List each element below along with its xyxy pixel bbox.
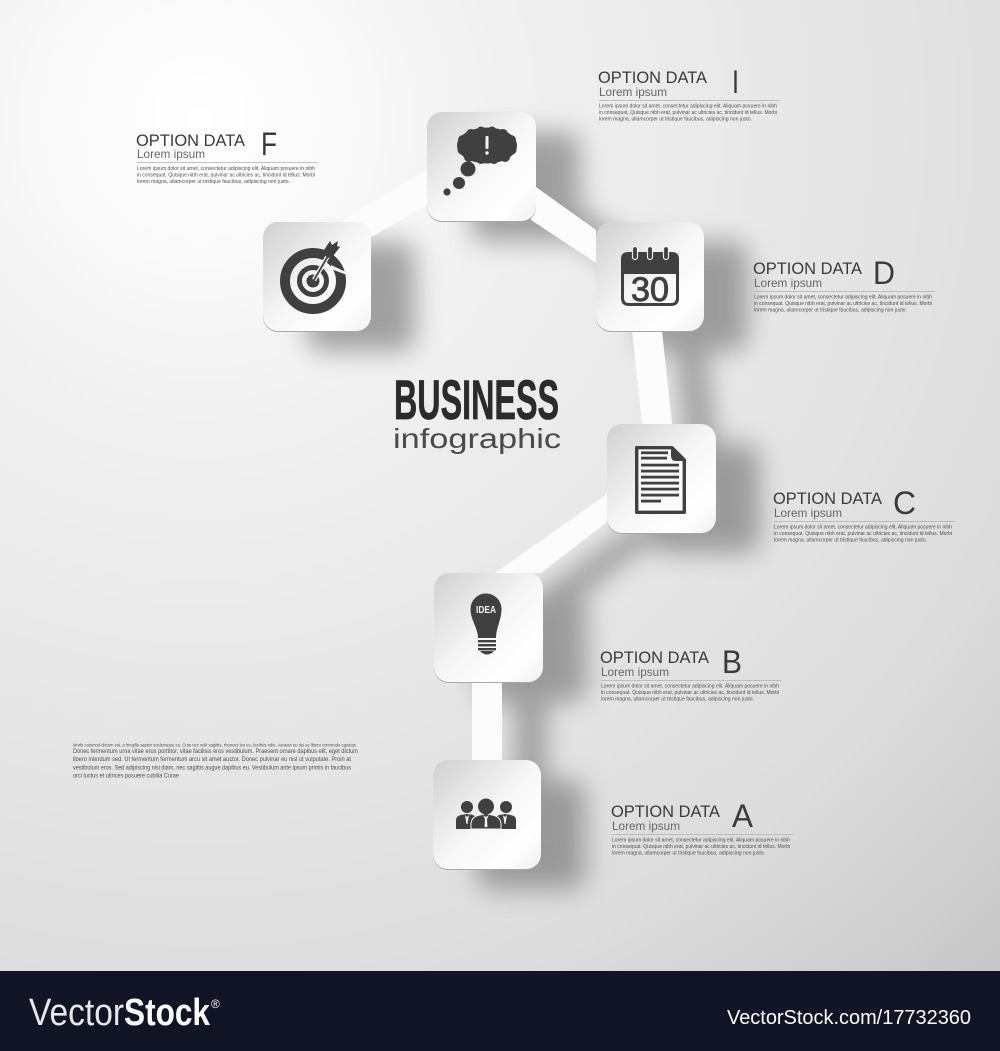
text block: option C: lorem magna, ullamcorper ut tristique faucibus, adipiscing non justo. bbox=[774, 538, 927, 544]
text block: option D: D bbox=[873, 255, 895, 291]
text block: option B: OPTION DATA bbox=[600, 648, 710, 667]
text block: option D bbox=[753, 255, 935, 314]
text block: description paragraph: Donec fermentum urna vitae eros porttitor, vitae facilisis eros vestibulum. Praesent ornare dapibus elit, eget dictum bbox=[73, 748, 358, 755]
text block: option C: Lorem ipsum dolor sit amet, consectetur adipiscing elit. Aliquam posuere in nibh bbox=[774, 524, 952, 530]
title: infographic bbox=[393, 423, 561, 454]
icon: target with arrow bbox=[285, 241, 347, 309]
card: idea bbox=[434, 573, 543, 683]
connector: idea to people bbox=[472, 682, 502, 760]
connector: calendar to document bbox=[632, 331, 672, 424]
text block: option A: in consequat. Quisque nibh erat, pulvinar ac ultricies ac, tincidunt id tellus. Morbi bbox=[612, 844, 790, 850]
footer logo: ® bbox=[211, 997, 220, 1011]
connector: document to idea bbox=[495, 494, 607, 573]
text block: option F: Lorem ipsum bbox=[137, 147, 205, 161]
text block: option C: OPTION DATA bbox=[773, 489, 883, 508]
text block: option D: in consequat. Quisque nibh erat, pulvinar ac ultricies ac, tincidunt id tellus. Morbi bbox=[754, 301, 932, 307]
text block: option I: Lorem ipsum bbox=[599, 85, 667, 99]
soft shadows of cards and connectors bbox=[307, 132, 760, 889]
text block: option I: Lorem ipsum dolor sit amet, consectetur adipiscing elit. Aliquam posuere in nibh bbox=[599, 104, 777, 110]
icon: document bbox=[637, 446, 686, 512]
text block: description paragraph: orci luctus et ultrices posuere cubilia Curae bbox=[73, 772, 179, 780]
text block: option I: in consequat. Quisque nibh erat, pulvinar ac ultricies ac, tincidunt id tellus. Morbi bbox=[599, 110, 777, 116]
text block: option F: F bbox=[261, 126, 277, 162]
text block: option F: lorem magna, ullamcorper ut tristique faucibus, adipiscing non justo. bbox=[137, 179, 290, 185]
text block: option I: OPTION DATA bbox=[598, 68, 708, 87]
text block: option D: Lorem ipsum bbox=[754, 276, 822, 290]
text block: option F: OPTION DATA bbox=[136, 131, 246, 150]
title bbox=[393, 368, 561, 454]
footer logo: Vector bbox=[29, 992, 124, 1034]
text block: option D: lorem magna, ullamcorper ut tristique faucibus, adipiscing non justo. bbox=[754, 308, 907, 314]
text block: option A: A bbox=[732, 798, 754, 834]
text block: option B: Lorem ipsum dolor sit amet, consectetur adipiscing elit. Aliquam posuere in nibh bbox=[601, 684, 779, 690]
text block: option D: OPTION DATA bbox=[753, 259, 863, 278]
text block: option C: C bbox=[893, 485, 916, 521]
text block: option B: B bbox=[722, 644, 742, 680]
text block: option C: in consequat. Quisque nibh erat, pulvinar ac ultricies ac, tincidunt id tellus. Morbi bbox=[774, 531, 952, 537]
text block: option B bbox=[600, 644, 782, 702]
text block: option B: lorem magna, ullamcorper ut tristique faucibus, adipiscing non justo. bbox=[601, 696, 754, 702]
text block: option I: lorem magna, ullamcorper ut tristique faucibus, adipiscing non justo. bbox=[599, 116, 752, 122]
text block: option A: Lorem ipsum bbox=[612, 819, 680, 833]
text block: option F: in consequat. Quisque nibh erat, pulvinar ac ultricies ac, tincidunt id tellus. Morbi bbox=[137, 172, 315, 178]
text block: option A: lorem magna, ullamcorper ut tristique faucibus, adipiscing non justo. bbox=[612, 850, 765, 856]
text block: option I bbox=[598, 64, 780, 122]
text block: option A bbox=[611, 798, 793, 856]
icon: thought bubble bbox=[443, 126, 517, 196]
icon: calendar: 30 bbox=[631, 271, 669, 309]
text block: option F bbox=[136, 126, 318, 185]
text block: option I: I bbox=[732, 64, 739, 100]
icon: light bulb: IDEA bbox=[476, 605, 496, 616]
text block: option A: Lorem ipsum dolor sit amet, consectetur adipiscing elit. Aliquam posuere in nibh bbox=[612, 838, 790, 844]
card: thought bubble bbox=[427, 112, 536, 222]
card: target bbox=[263, 222, 371, 332]
card: document bbox=[607, 424, 716, 534]
text block: description paragraph: vestibulum eros. Sed adipiscing nisi diam, nec sagittis augue dapibus eu. Vestibulum ante ipsum primis in faucibus bbox=[73, 764, 351, 772]
footer image id: VectorStock.com/17732360 bbox=[727, 1007, 971, 1029]
card: calendar bbox=[596, 222, 704, 332]
title: BUSINESS bbox=[394, 368, 559, 431]
text block: option D: Lorem ipsum dolor sit amet, consectetur adipiscing elit. Aliquam posuere in nibh bbox=[754, 294, 932, 300]
text block: option F: Lorem ipsum dolor sit amet, consectetur adipiscing elit. Aliquam posuere in nibh bbox=[137, 166, 315, 172]
text block: description paragraph: libero interdum sed. Ut fermentum fermentum arcu sit amet auctor. Donec pulvinar eu nisl ut vulputate. Proin at bbox=[73, 756, 351, 763]
footer logo bbox=[29, 992, 220, 1034]
footer logo: Stock bbox=[124, 992, 211, 1034]
icon: business team bbox=[456, 798, 516, 829]
text block: option A: OPTION DATA bbox=[611, 802, 721, 821]
text block: option B: Lorem ipsum bbox=[601, 665, 669, 679]
text block: description paragraph bbox=[73, 742, 358, 780]
card: people bbox=[433, 760, 541, 870]
footer bar bbox=[0, 971, 1000, 1051]
text block: option C bbox=[773, 485, 955, 544]
text block: option B: in consequat. Quisque nibh erat, pulvinar ac ultricies ac, tincidunt id tellus. Morbi bbox=[601, 690, 779, 696]
connector: target to thought bbox=[340, 169, 427, 237]
text block: option C: Lorem ipsum bbox=[774, 506, 842, 520]
connector: thought to calendar bbox=[531, 187, 596, 263]
text block: description paragraph: Morbi euismod dictum est, a fringilla sapien scelerisque eu. Cras nec velit sagittis, rhoncus leo eu, facilisis odio. Aenean eu dui ac libero commodo egestas. bbox=[73, 742, 357, 748]
